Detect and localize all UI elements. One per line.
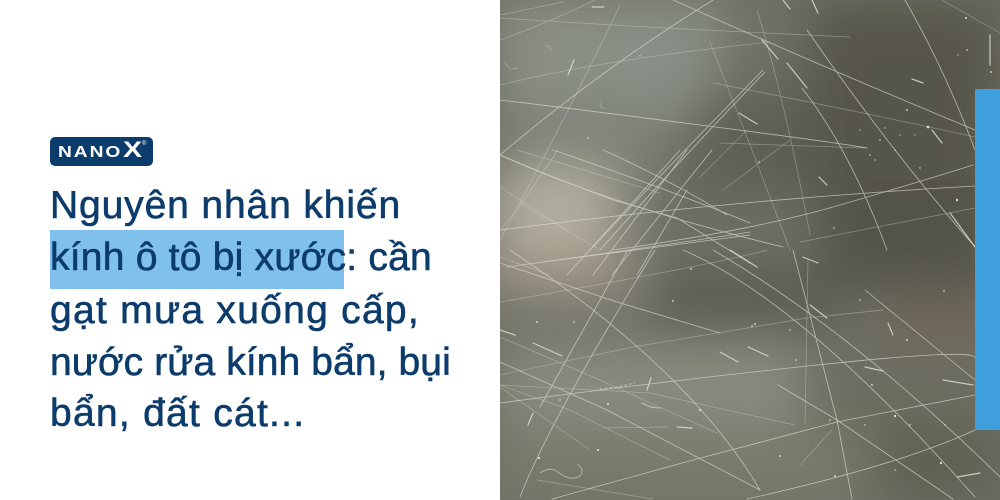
heading <box>50 184 451 435</box>
highlight behind heading phrase <box>50 230 344 289</box>
specks <box>536 17 992 477</box>
logo: NANOX badge: NANO <box>58 144 122 160</box>
logo: NANOX badge <box>50 137 153 166</box>
heading: Nguyên nhân khiến <box>50 184 401 227</box>
logo: NANOX badge: ® <box>142 141 146 147</box>
heading: nước rửa kính bẩn, bụi <box>50 341 451 384</box>
heading: bẩn, đất cát... <box>50 392 305 435</box>
scratches <box>500 0 1000 499</box>
blue accent bar <box>975 89 1000 430</box>
photo: scratched car glass <box>500 0 1000 500</box>
logo: NANOX badge: X <box>123 137 142 162</box>
heading: gạt mưa xuống cấp, <box>50 289 420 332</box>
heading: kính ô tô bị xước: cần <box>50 236 432 279</box>
